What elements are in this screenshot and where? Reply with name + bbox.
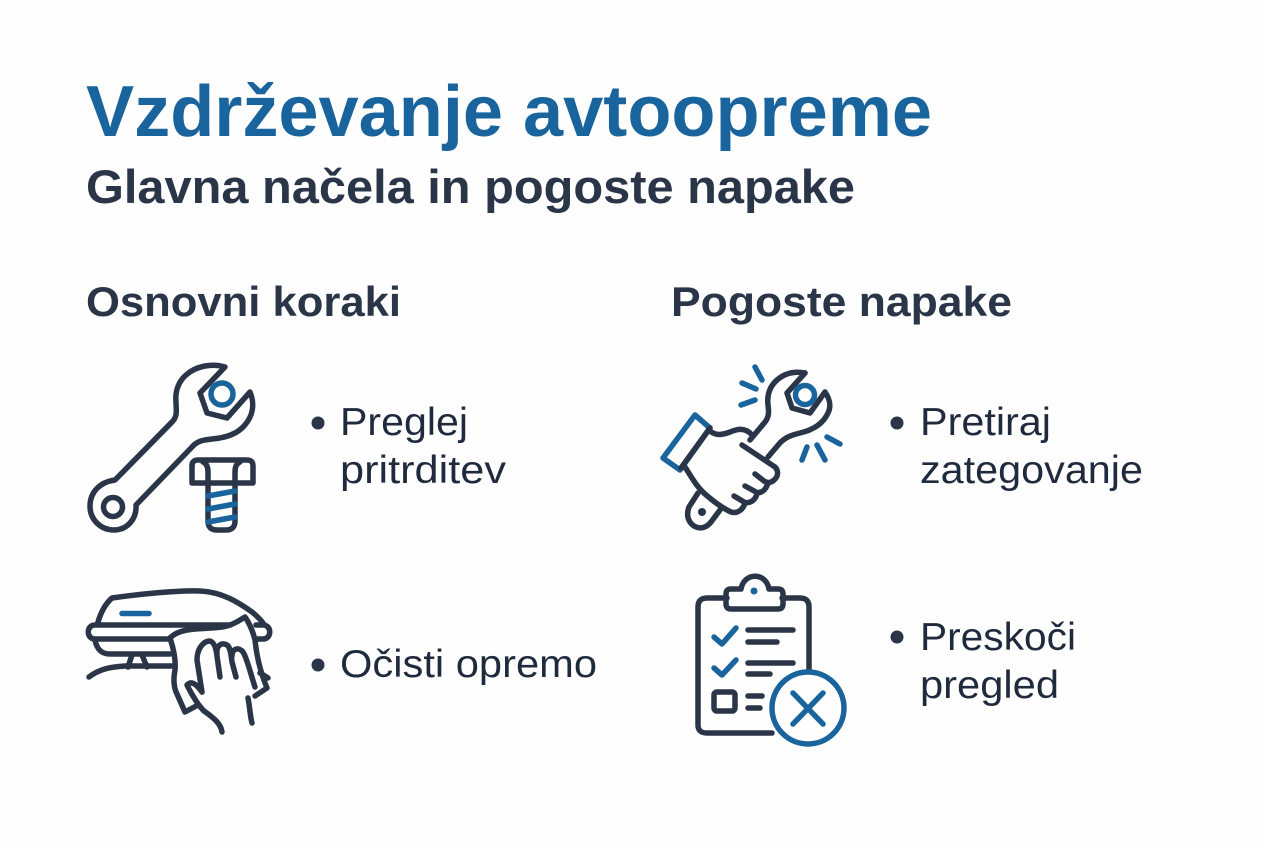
icon: clipboard with X bbox=[698, 576, 844, 744]
bullet: inspect fastening: pritrditev bbox=[340, 449, 507, 492]
bullet: overtighten bbox=[890, 401, 1143, 492]
bullet: skip inspection: Preskoči bbox=[920, 616, 1076, 659]
heading: common mistakes: Pogoste napake bbox=[671, 278, 1012, 325]
bullet: inspect fastening bbox=[312, 401, 507, 492]
bullet: inspect fastening: Preglej bbox=[340, 401, 468, 444]
bullet: skip inspection bbox=[890, 616, 1076, 707]
heading: basic steps: Osnovni koraki bbox=[86, 278, 401, 325]
bullet: skip inspection: pregled bbox=[920, 664, 1059, 707]
subtitle: Glavna načela in pogoste napake bbox=[86, 160, 855, 213]
icon: wrench and bolt bbox=[90, 365, 253, 530]
bullet: overtighten: Pretiraj bbox=[920, 401, 1051, 444]
title: Vzdrževanje avtoopreme bbox=[86, 72, 932, 152]
bullet: overtighten: zategovanje bbox=[920, 449, 1143, 492]
icon: hand overtightening wrench bbox=[663, 367, 840, 528]
bullet: clean equipment: Očisti opremo bbox=[340, 643, 597, 686]
icon: hand cleaning roof box bbox=[88, 591, 270, 732]
